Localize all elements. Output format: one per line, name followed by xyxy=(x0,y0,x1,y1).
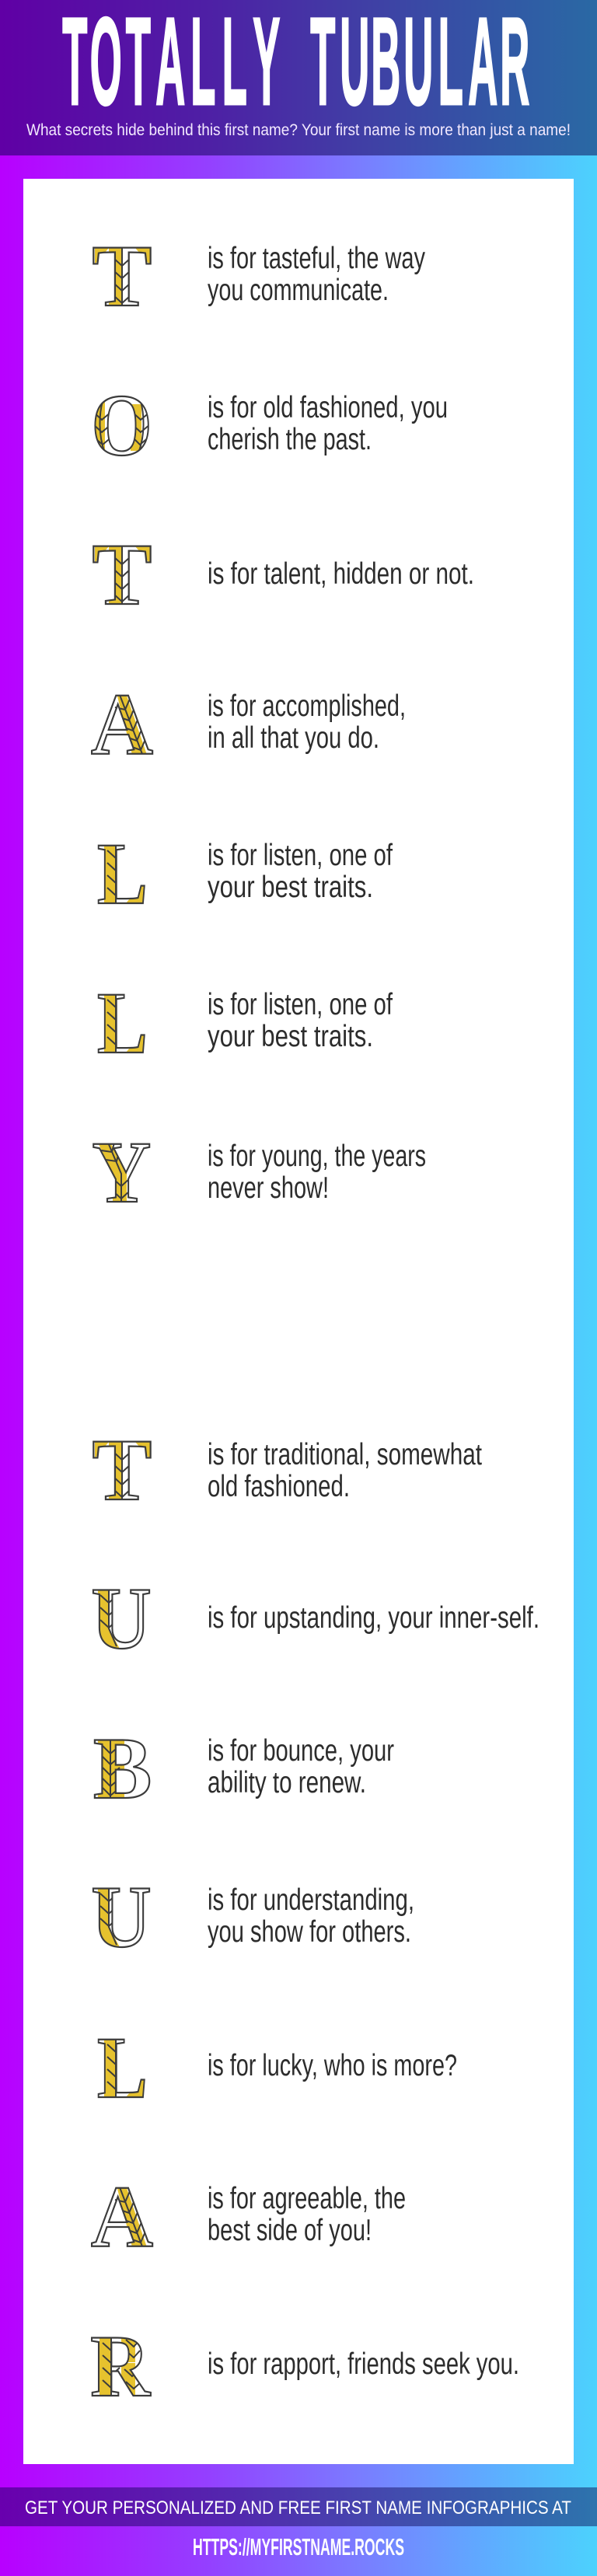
row: U upstanding xyxy=(92,1589,538,1649)
icon: letter L xyxy=(98,2038,145,2099)
text: is for traditional, somewhat xyxy=(208,1438,482,1471)
icon: letter U: U xyxy=(91,1869,152,1966)
icon: letter A: A xyxy=(91,676,153,773)
text: is for lucky, who is more? xyxy=(208,2049,457,2082)
text: your best traits. xyxy=(208,871,373,904)
text: old fashioned. xyxy=(208,1470,350,1503)
text: best side of you! xyxy=(208,2214,372,2247)
row: A agreeable xyxy=(91,2186,405,2247)
icon: letter A: A xyxy=(91,2169,153,2266)
icon: letter L: L xyxy=(97,825,148,923)
row: T tasteful xyxy=(93,246,425,306)
icon: letter U xyxy=(92,1887,151,1948)
footer url: HTTPS://MYFIRSTNAME.ROCKS xyxy=(193,2533,404,2560)
text: is for understanding, xyxy=(208,1883,414,1917)
text: is for talent, hidden or not. xyxy=(208,557,474,591)
row: U understanding xyxy=(92,1887,412,1948)
icon: letter R xyxy=(91,2337,152,2397)
icon: letter L xyxy=(98,844,145,905)
text: is for old fashioned, you xyxy=(208,391,448,424)
text: is for accomplished, xyxy=(208,689,406,723)
text: is for agreeable, the xyxy=(208,2182,406,2215)
row: A accomplished xyxy=(91,693,404,755)
icon: letter T xyxy=(93,247,152,306)
row: T talent xyxy=(93,546,473,605)
icon: letter T xyxy=(93,546,152,605)
icon: letter L xyxy=(98,993,145,1054)
text: ability to renew. xyxy=(208,1766,366,1799)
row: T traditional xyxy=(93,1441,482,1500)
text: you show for others. xyxy=(208,1915,411,1949)
text: never show! xyxy=(208,1171,329,1205)
icon: letter B: B xyxy=(93,1720,152,1817)
text: is for listen, one of xyxy=(208,839,393,872)
row: L listen xyxy=(98,843,393,905)
text: cherish the past. xyxy=(208,423,372,456)
icon: letter L: L xyxy=(97,974,148,1072)
icon: letter Y: Y xyxy=(92,1124,151,1221)
footer band xyxy=(0,2487,597,2526)
text: is for tasteful, the way xyxy=(208,242,425,275)
icon: letter Y xyxy=(93,1143,151,1203)
row: L lucky xyxy=(98,2038,456,2099)
row: O old fashioned xyxy=(94,395,446,457)
icon: letter L: L xyxy=(97,2019,148,2117)
icon: letter B xyxy=(93,1739,151,1799)
icon: letter A xyxy=(91,2187,154,2247)
icon: letter A xyxy=(91,695,154,755)
text: your best traits. xyxy=(208,1020,373,1053)
icon: letter T: T xyxy=(92,227,152,325)
icon: letter T xyxy=(93,1441,152,1500)
header band xyxy=(0,0,597,155)
row: R rapport xyxy=(91,2337,518,2397)
icon: letter T: T xyxy=(92,1421,152,1519)
icon: letter R: R xyxy=(90,2317,152,2415)
icon: letter U xyxy=(92,1589,151,1649)
row: B bounce xyxy=(93,1738,393,1799)
row: Y young xyxy=(93,1143,425,1203)
text: you communicate. xyxy=(208,274,389,307)
text: is for young, the years xyxy=(208,1140,426,1173)
text: is for listen, one of xyxy=(208,988,393,1021)
text: in all that you do. xyxy=(208,721,379,755)
text: is for bounce, your xyxy=(208,1734,394,1768)
icon: letter U: U xyxy=(91,1570,152,1667)
icon: letter O: O xyxy=(92,378,152,474)
icon: letter O xyxy=(94,395,149,457)
icon: letter T: T xyxy=(92,525,152,623)
row: L listen xyxy=(98,992,393,1054)
